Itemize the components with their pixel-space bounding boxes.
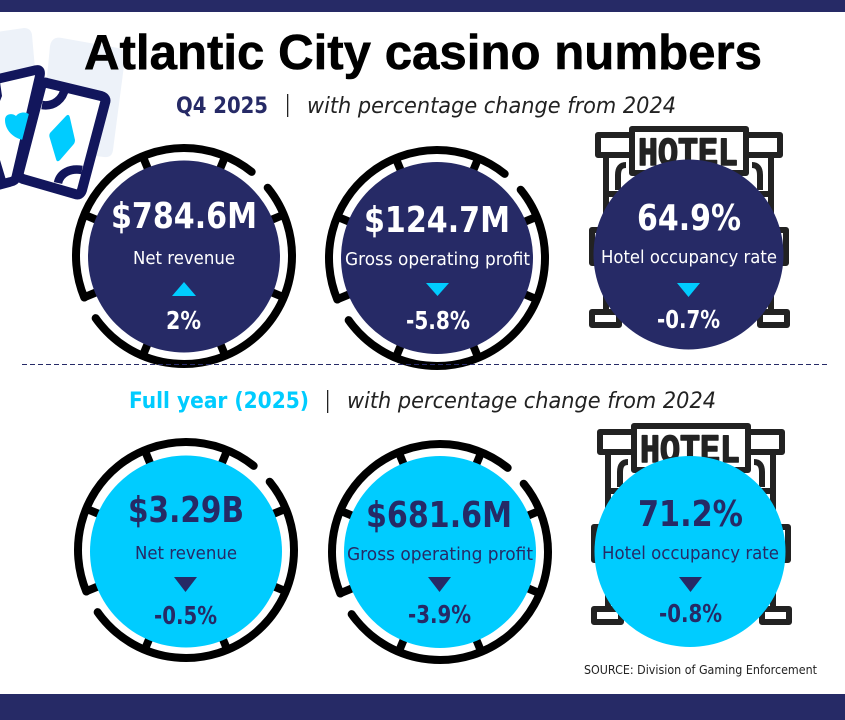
stat: full-year hotel occupancy rate: Hotel occupancy rate [602, 543, 779, 564]
subtitle: Q4 2025: with percentage change from 2024 [307, 94, 676, 119]
top band [0, 0, 845, 12]
title: Atlantic City casino numbers [84, 26, 762, 80]
stat: full-year net revenue: $3.29B [128, 490, 244, 531]
icon: hotel building, full year [594, 426, 789, 622]
stat: Q4 hotel occupancy rate: 64.9% [637, 198, 741, 239]
subtitle: full year 2025 [129, 389, 716, 414]
stat: Q4 gross operating profit [285, 106, 589, 410]
stat: Q4 hotel occupancy rate [594, 160, 784, 350]
icon: playing cards [0, 28, 125, 194]
stat: Q4 gross operating profit: -5.8% [406, 306, 470, 335]
stat: full-year net revenue: -0.5% [154, 601, 217, 630]
divider [22, 364, 828, 366]
stat: full-year gross operating profit: -3.9% [408, 600, 471, 629]
stat: full-year net revenue [34, 398, 338, 702]
icon: hotel building, Q4: HOTEL [638, 133, 738, 178]
stat: Q4 gross operating profit: Gross operating profit [345, 249, 530, 270]
stat: Q4 net revenue [32, 104, 336, 408]
stat: full-year hotel occupancy rate: 71.2% [638, 494, 743, 535]
stat: full-year gross operating profit: $681.6M [366, 495, 512, 536]
bottom band [0, 694, 845, 720]
stat: Q4 hotel occupancy rate: Hotel occupancy rate [601, 247, 777, 268]
stat: full-year gross operating profit: Gross operating profit [347, 544, 533, 565]
source note: SOURCE: Division of Gaming Enforcement [584, 663, 817, 677]
stat: Q4 net revenue: 2% [166, 306, 201, 335]
icon: hotel building, Q4 [592, 129, 787, 325]
icon: hotel building, full year: HOTEL [640, 430, 740, 475]
stat: Q4 net revenue: $784.6M [111, 196, 257, 237]
stat: full-year hotel occupancy rate: -0.8% [659, 599, 722, 628]
subtitle: full year 2025: Full year (2025) [129, 389, 309, 414]
stat: full-year gross operating profit [288, 400, 592, 704]
stat: Q4 gross operating profit: $124.7M [364, 200, 510, 241]
subtitle: Q4 2025: Q4 2025 [176, 94, 268, 119]
subtitle: full year 2025: with percentage change from 2024 [347, 389, 716, 414]
stat: full-year net revenue: Net revenue [135, 543, 237, 564]
stat: full-year hotel occupancy rate [594, 456, 786, 647]
stat: Q4 hotel occupancy rate: -0.7% [657, 305, 720, 334]
stat: Q4 net revenue: Net revenue [133, 248, 235, 269]
